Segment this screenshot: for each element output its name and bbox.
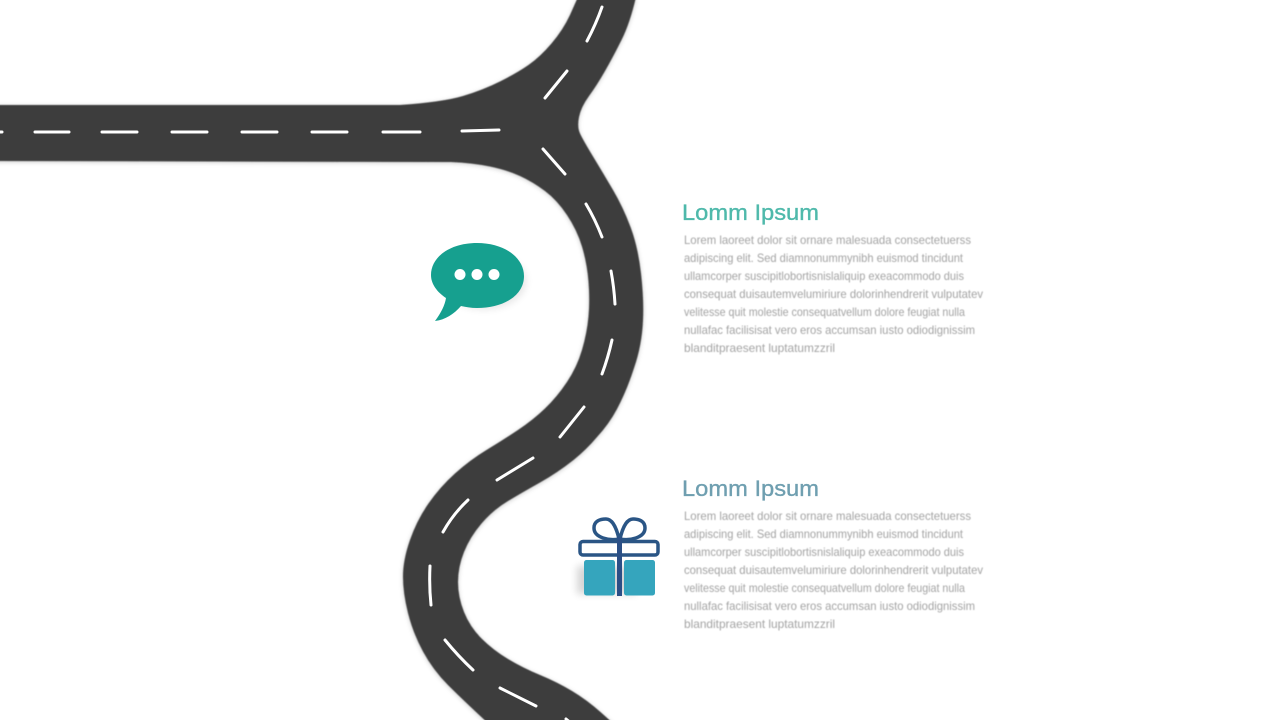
body text: first: velitesse quit molestie consequatvellum dolore feugiat nulla bbox=[684, 305, 965, 319]
body text: first bbox=[684, 233, 983, 355]
text block: second bbox=[682, 476, 983, 631]
body text: first: adipiscing elit. Sed diamnonummynibh euismod tincidunt bbox=[684, 251, 964, 265]
body text: first: nullafac facilisisat vero eros accumsan iusto odiodignissim bbox=[684, 323, 975, 337]
body text: first: blanditpraesent luptatumzzril bbox=[684, 341, 835, 355]
body text: second: velitesse quit molestie consequatvellum dolore feugiat nulla bbox=[684, 581, 965, 595]
body text: first: ullamcorper suscipitlobortisnislaliquip exeacommodo duis bbox=[684, 269, 964, 283]
text block: first bbox=[682, 200, 983, 355]
lane dashes bbox=[0, 7, 615, 720]
body text: first: consequat duisautemvelumiriure dolorinhendrerit vulputatev bbox=[684, 287, 983, 301]
heading: second: Lomm Ipsum bbox=[682, 476, 819, 501]
road shadow bbox=[0, 0, 643, 720]
body text: second: consequat duisautemvelumiriure dolorinhendrerit vulputatev bbox=[684, 563, 983, 577]
icon: gift box bbox=[577, 519, 658, 596]
body text: second bbox=[684, 509, 983, 631]
icon: speech bubble bbox=[431, 243, 526, 321]
body text: second: ullamcorper suscipitlobortisnislaliquip exeacommodo duis bbox=[684, 545, 964, 559]
body text: second: adipiscing elit. Sed diamnonummynibh euismod tincidunt bbox=[684, 527, 964, 541]
road surface bbox=[0, 0, 643, 720]
body text: second: blanditpraesent luptatumzzril bbox=[684, 617, 835, 631]
body text: first: Lorem laoreet dolor sit ornare malesuada consectetuerss bbox=[684, 233, 971, 247]
body text: second: nullafac facilisisat vero eros accumsan iusto odiodignissim bbox=[684, 599, 975, 613]
body text: second: Lorem laoreet dolor sit ornare malesuada consectetuerss bbox=[684, 509, 971, 523]
road network bbox=[0, 0, 643, 720]
heading: first: Lomm Ipsum bbox=[682, 200, 819, 225]
